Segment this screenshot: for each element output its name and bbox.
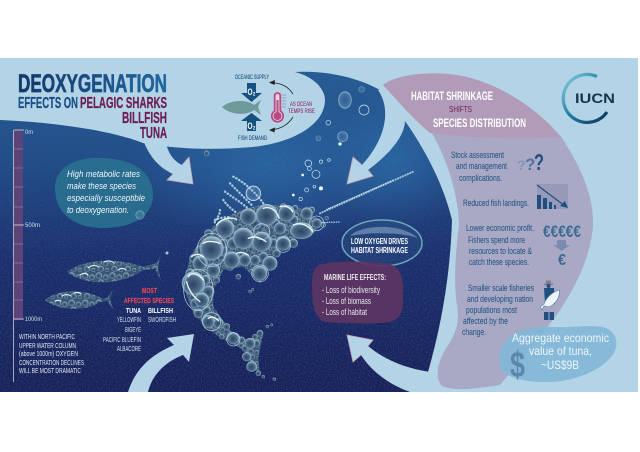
icon: question marks: ? [525, 155, 535, 174]
text: smaller scale fisheries [462, 283, 534, 337]
arrow: bottom left [128, 334, 194, 392]
title: EFFECTS ON [18, 95, 78, 112]
north pacific note [19, 332, 84, 375]
icon: question marks [517, 149, 544, 175]
depth scale: 0m [25, 130, 33, 136]
depth scale [14, 130, 42, 382]
text: lower economic profit: resources to locate & [469, 246, 532, 256]
depth scale: 1000m [25, 317, 42, 323]
text: lower economic profit: Lower economic profit. [466, 223, 534, 233]
most affected species list: BILLFISH [148, 308, 173, 315]
callout: high metabolic rates [55, 158, 153, 228]
panel: marine life effects: - Loss of biomass [322, 296, 371, 307]
text: smaller scale fisheries: change. [462, 327, 486, 337]
icon: question marks: ? [517, 157, 526, 173]
text: smaller scale fisheries: affected by the [463, 316, 508, 326]
most affected species list: MOST [142, 288, 158, 295]
icon: fisher holding fish [540, 280, 560, 320]
icon: euro reduction [543, 222, 581, 269]
low oxygen bubble callout [342, 220, 422, 266]
dorsal fin strings [213, 177, 263, 225]
most affected species list [103, 288, 176, 353]
text: reduced fish landings: Reduced fish landings. [463, 198, 529, 208]
icon: question marks: ? [534, 149, 544, 175]
marlin made of bubbles [182, 151, 413, 381]
oxygen supply and demand diagram: FISH DEMAND [238, 135, 267, 142]
callout: high metabolic rates: make these species [67, 181, 136, 192]
most affected species list: BIGEYE [125, 327, 141, 334]
icon: euro reduction: € [558, 252, 566, 269]
text: smaller scale fisheries: Smaller scale fisheries [468, 283, 534, 293]
text: stock assessment: complications. [459, 173, 502, 183]
north pacific note: WITHIN NORTH PACIFIC [19, 332, 75, 341]
panel: habitat shrinkage heading [383, 73, 561, 138]
background panel [0, 58, 638, 392]
bill [320, 172, 413, 223]
title: DEOXYGENATION [18, 70, 167, 98]
oxygen supply and demand diagram: O₂ [248, 87, 256, 98]
arrow: top left [143, 140, 193, 184]
small tuna made of bubbles (upper) [67, 252, 168, 282]
callout: aggregate economic value: $ [510, 344, 525, 385]
callout: aggregate economic value: value of tuna, [529, 344, 592, 358]
oxygen supply and demand diagram: OCEANIC SUPPLY [235, 74, 269, 81]
arrow: top right [347, 90, 405, 184]
depth scale: 500m [25, 223, 40, 229]
panel: marine life effects: - Loss of biodiversity [322, 285, 380, 296]
panel: habitat shrinkage heading: HABITAT SHRINKAGE [411, 89, 493, 103]
most affected species list: SWORDFISH [148, 317, 176, 324]
panel: consequences list background [430, 130, 593, 389]
oxygen supply and demand diagram: O₂ [248, 121, 256, 132]
logo: IUCN [563, 74, 615, 122]
panel: habitat shrinkage heading: SHIFTS [449, 104, 472, 114]
small filler bubbles [185, 203, 329, 352]
text: lower economic profit: Fishers spend more [468, 235, 525, 245]
title: PELAGIC SHARKS [80, 95, 167, 112]
north pacific note: WILL BE MOST DRAMATIC [19, 366, 81, 375]
text: lower economic profit [466, 223, 534, 267]
callout: high metabolic rates: High metabolic rates [67, 169, 140, 180]
panel: habitat shrinkage heading: SPECIES DISTRIBUTION [433, 116, 526, 130]
icon: declining chart [537, 184, 568, 209]
panel: marine life effects: MARINE LIFE EFFECTS: [324, 273, 386, 282]
logo: IUCN: IUCN [575, 90, 615, 106]
loose rising bubbles [292, 86, 369, 201]
north pacific note: UPPER WATER COLUMN [19, 341, 76, 350]
oxygen supply and demand diagram: TEMPS RISE [288, 108, 315, 115]
most affected species list: AFFECTED SPECIES [124, 298, 174, 305]
bubble highlights [187, 206, 313, 321]
panel: marine life effects: - Loss of habitat [322, 307, 367, 318]
text: smaller scale fisheries: and developing nation [467, 294, 533, 304]
callout: aggregate economic value: Aggregate economic [512, 331, 609, 345]
text: lower economic profit: catch these species. [469, 257, 529, 267]
oxygen supply and demand diagram: AS OCEAN [290, 101, 312, 108]
text: smaller scale fisheries: populations most [466, 305, 517, 315]
title: BILLFISH [122, 110, 167, 127]
panel: marine life effects [312, 261, 403, 323]
text: stock assessment: Stock assessment [451, 150, 504, 160]
icon: euro reduction: €€€€€ [543, 222, 581, 241]
small tuna made of bubbles (lower) [45, 289, 113, 309]
callout: high metabolic rates: to deoxygenation. [67, 205, 129, 216]
callout: aggregate economic value [499, 326, 616, 385]
callout: high metabolic rates: especially susceptible [67, 193, 145, 204]
arrow: bottom right [347, 335, 445, 392]
title [18, 70, 167, 142]
title: TUNA [140, 125, 167, 142]
callout: aggregate economic value: ~US$9B [541, 358, 579, 372]
low oxygen bubble callout: LOW OXYGEN DRIVES [351, 237, 408, 246]
low oxygen bubble callout: HABITAT SHRINKAGE [351, 246, 408, 255]
deep ocean illustration [0, 60, 465, 394]
north pacific note: CONCENTRATION DECLINES [19, 358, 84, 367]
text: stock assessment: and management [456, 161, 507, 171]
large bubbles [182, 151, 322, 381]
most affected species list: YELLOWFIN [117, 317, 141, 324]
most affected species list: ALBACORE [117, 346, 141, 353]
north pacific note: (above 1000m) OXYGEN [19, 349, 78, 358]
most affected species list: TUNA [126, 308, 141, 315]
text: stock assessment [451, 150, 507, 183]
most affected species list: PACIFIC BLUEFIN [103, 337, 141, 344]
oxygen supply and demand diagram [222, 74, 315, 142]
